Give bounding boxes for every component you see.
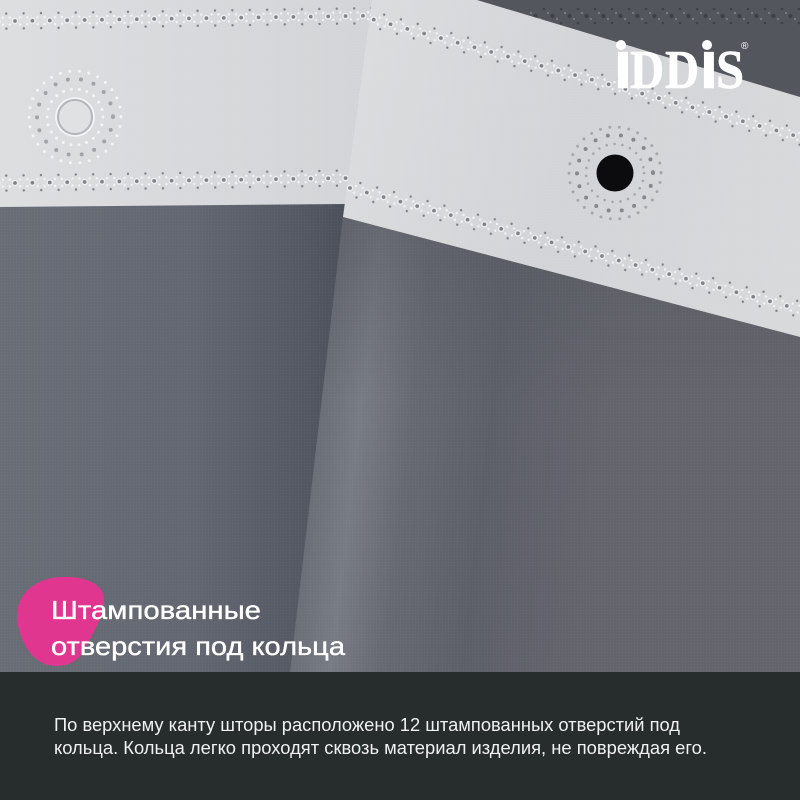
logo: iDDiS: ®: [741, 41, 749, 52]
title: [51, 595, 346, 661]
lower stitched line, left: [0, 165, 361, 196]
upper stitched line, right: [370, 13, 800, 146]
title: Штампованные: [51, 595, 261, 625]
logo: iDDiS: D: [665, 40, 699, 101]
body text: По верхнему канту шторы расположено 12 штампованных отверстий под: [54, 715, 680, 735]
panel: bottom bar: [0, 672, 800, 800]
title: отверстия под кольца: [51, 631, 346, 661]
icon: right stamped eyelet with black hole: [569, 127, 661, 219]
lower stitched line, right: [347, 182, 800, 317]
body text: кольца. Кольца легко проходят сквозь материал изделия, не повреждая его.: [54, 738, 707, 758]
logo: iDDiS: [616, 40, 748, 89]
panel: left curtain white band: [0, 0, 389, 207]
logo: iDDiS: i: [614, 27, 632, 103]
logo: iDDiS: D: [630, 40, 664, 101]
panel: background top right curtain: [478, 0, 800, 97]
logo: iDDiS: i: [700, 27, 718, 103]
upper stitched line, left: [0, 2, 389, 34]
panel: left curtain body: [0, 0, 400, 672]
icon: left stamped eyelet: [29, 71, 121, 163]
logo: iDDiS: S: [716, 40, 744, 100]
body text: [54, 715, 707, 758]
panel: right curtain white band: [338, 0, 800, 337]
panel: right curtain body: [290, 217, 800, 672]
accent: pink blob: [17, 577, 104, 666]
